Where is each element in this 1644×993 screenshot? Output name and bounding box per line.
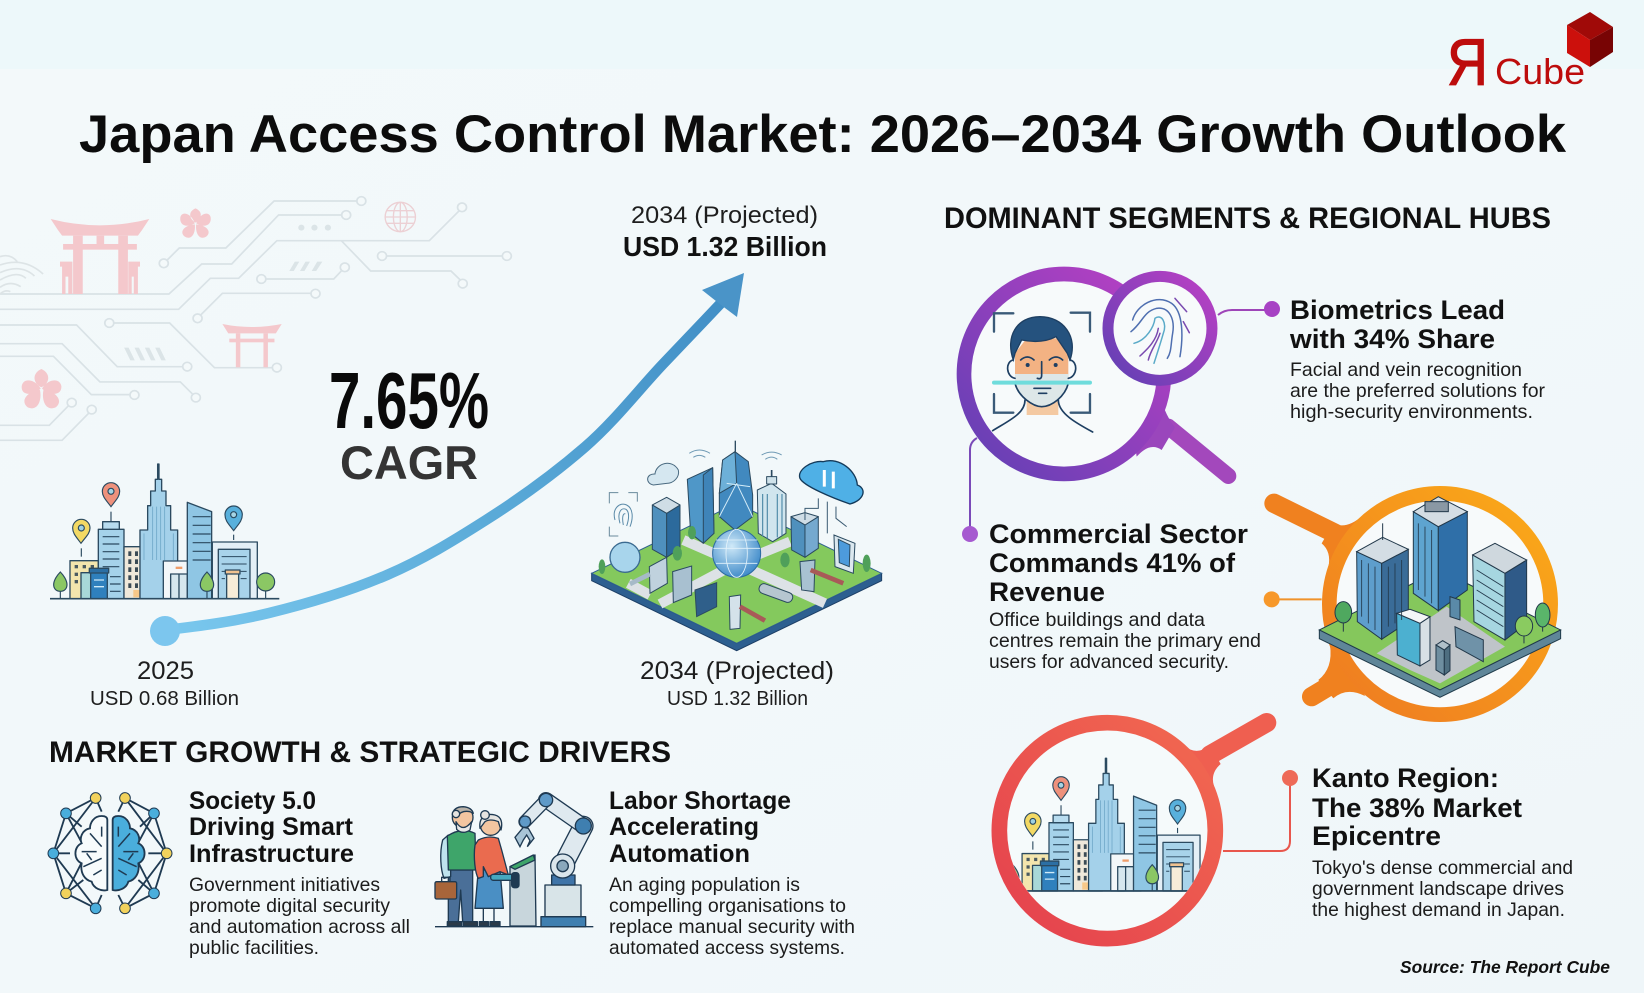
icon: isometric smart city 2034 <box>592 441 882 651</box>
text: Society 5.0 <box>189 787 410 959</box>
text: Kanto <box>1312 763 1573 921</box>
text: Kanto: Kanto Region: <box>1312 763 1499 793</box>
text: Society 5.0: public facilities. <box>189 937 319 959</box>
CAGR stat: 7.65% <box>329 356 489 445</box>
label: 2025 value: USD 0.68 Billion <box>90 688 239 710</box>
connector: biometrics <box>1218 310 1272 315</box>
source note: Source: The Report Cube <box>1400 957 1610 977</box>
icon: brain network <box>48 793 172 914</box>
icon: orange magnifier with office buildings <box>1264 493 1561 715</box>
text: Society 5.0: promote digital security <box>189 895 390 917</box>
text: Kanto: The 38% Market <box>1312 793 1522 823</box>
text: commercial: Commands 41% of <box>989 548 1236 578</box>
text: commercial: centres remain the primary end <box>989 630 1261 652</box>
text: commercial: Revenue <box>989 577 1105 607</box>
dot: commercial <box>962 526 978 542</box>
text: Kanto: Tokyo's dense commercial and <box>1312 857 1573 879</box>
text: biometrics: Facial and vein recognition <box>1290 359 1522 381</box>
CAGR stat <box>329 356 489 489</box>
text: commercial <box>989 519 1261 673</box>
start point <box>150 616 180 646</box>
text: Labor Shortage: compelling organisations to <box>609 895 846 917</box>
top band <box>0 0 1644 69</box>
text: biometrics: high-security environments. <box>1290 401 1533 423</box>
text: Labor Shortage: automated access systems. <box>609 937 845 959</box>
label: 2025 value <box>90 657 239 710</box>
label: 2034 projected, top <box>623 202 827 262</box>
logo: RCube <box>1447 12 1613 99</box>
text: commercial: Commercial Sector <box>989 519 1249 549</box>
text: Labor Shortage <box>609 787 855 959</box>
heading: dominant segments: DOMINANT SEGMENTS & REGIONAL HUBS <box>944 202 1551 235</box>
text: Labor Shortage: Automation <box>609 840 750 868</box>
CAGR stat: CAGR <box>340 436 478 489</box>
text: Society 5.0: Driving Smart <box>189 813 354 841</box>
logo: RCube: Cube <box>1495 51 1585 92</box>
label: 2025 value: 2025 <box>137 657 194 685</box>
text: Society 5.0: Government initiatives <box>189 874 380 896</box>
text: Kanto: the highest demand in Japan. <box>1312 899 1565 921</box>
dot: biometrics <box>1264 301 1280 317</box>
icon: red magnifier with Kanto skyline <box>999 723 1267 939</box>
text: commercial: users for advanced security. <box>989 651 1229 673</box>
text: Labor Shortage: replace manual security with <box>609 916 855 938</box>
text: biometrics <box>1289 295 1545 423</box>
text: biometrics: with 34% Share <box>1289 324 1495 354</box>
icon: purple magnifier with face scan and fingerprint <box>964 274 1228 476</box>
growth arrow <box>150 273 744 646</box>
connector: Kanto <box>1223 778 1290 851</box>
text: commercial: Office buildings and data <box>989 609 1205 631</box>
label: 2034 value, bottom: USD 1.32 Billion <box>667 688 808 710</box>
text: biometrics: are the preferred solutions for <box>1290 380 1545 402</box>
text: Kanto: Epicentre <box>1312 821 1441 851</box>
dot: Kanto <box>1282 770 1298 786</box>
text: Society 5.0: and automation across all <box>189 916 410 938</box>
icon: elderly couple and robot arm <box>435 793 593 927</box>
text: Society 5.0: Infrastructure <box>189 840 354 868</box>
text: biometrics: Biometrics Lead <box>1290 295 1505 325</box>
text: Kanto: government landscape drives <box>1312 878 1564 900</box>
decorative circuit and torii backdrop <box>0 197 511 440</box>
logo: RCube: Я <box>1447 25 1488 99</box>
text: Labor Shortage: An aging population is <box>609 874 800 896</box>
text: Society 5.0: Society 5.0 <box>189 787 316 815</box>
text: Labor Shortage: Accelerating <box>609 813 759 841</box>
label: 2034 value, bottom: 2034 (Projected) <box>640 657 834 685</box>
label: 2034 value, bottom <box>640 657 834 710</box>
label: 2034 projected, top: 2034 (Projected) <box>631 202 818 229</box>
label: 2034 projected, top: USD 1.32 Billion <box>623 231 827 262</box>
heading: market growth drivers: MARKET GROWTH & STRATEGIC DRIVERS <box>49 736 671 769</box>
title: Japan Access Control Market: 2026–2034 Growth Outlook <box>79 105 1567 164</box>
connector: commercial <box>970 438 977 534</box>
text: Labor Shortage: Labor Shortage <box>609 787 791 815</box>
icon: city skyline 2025 <box>50 464 279 599</box>
